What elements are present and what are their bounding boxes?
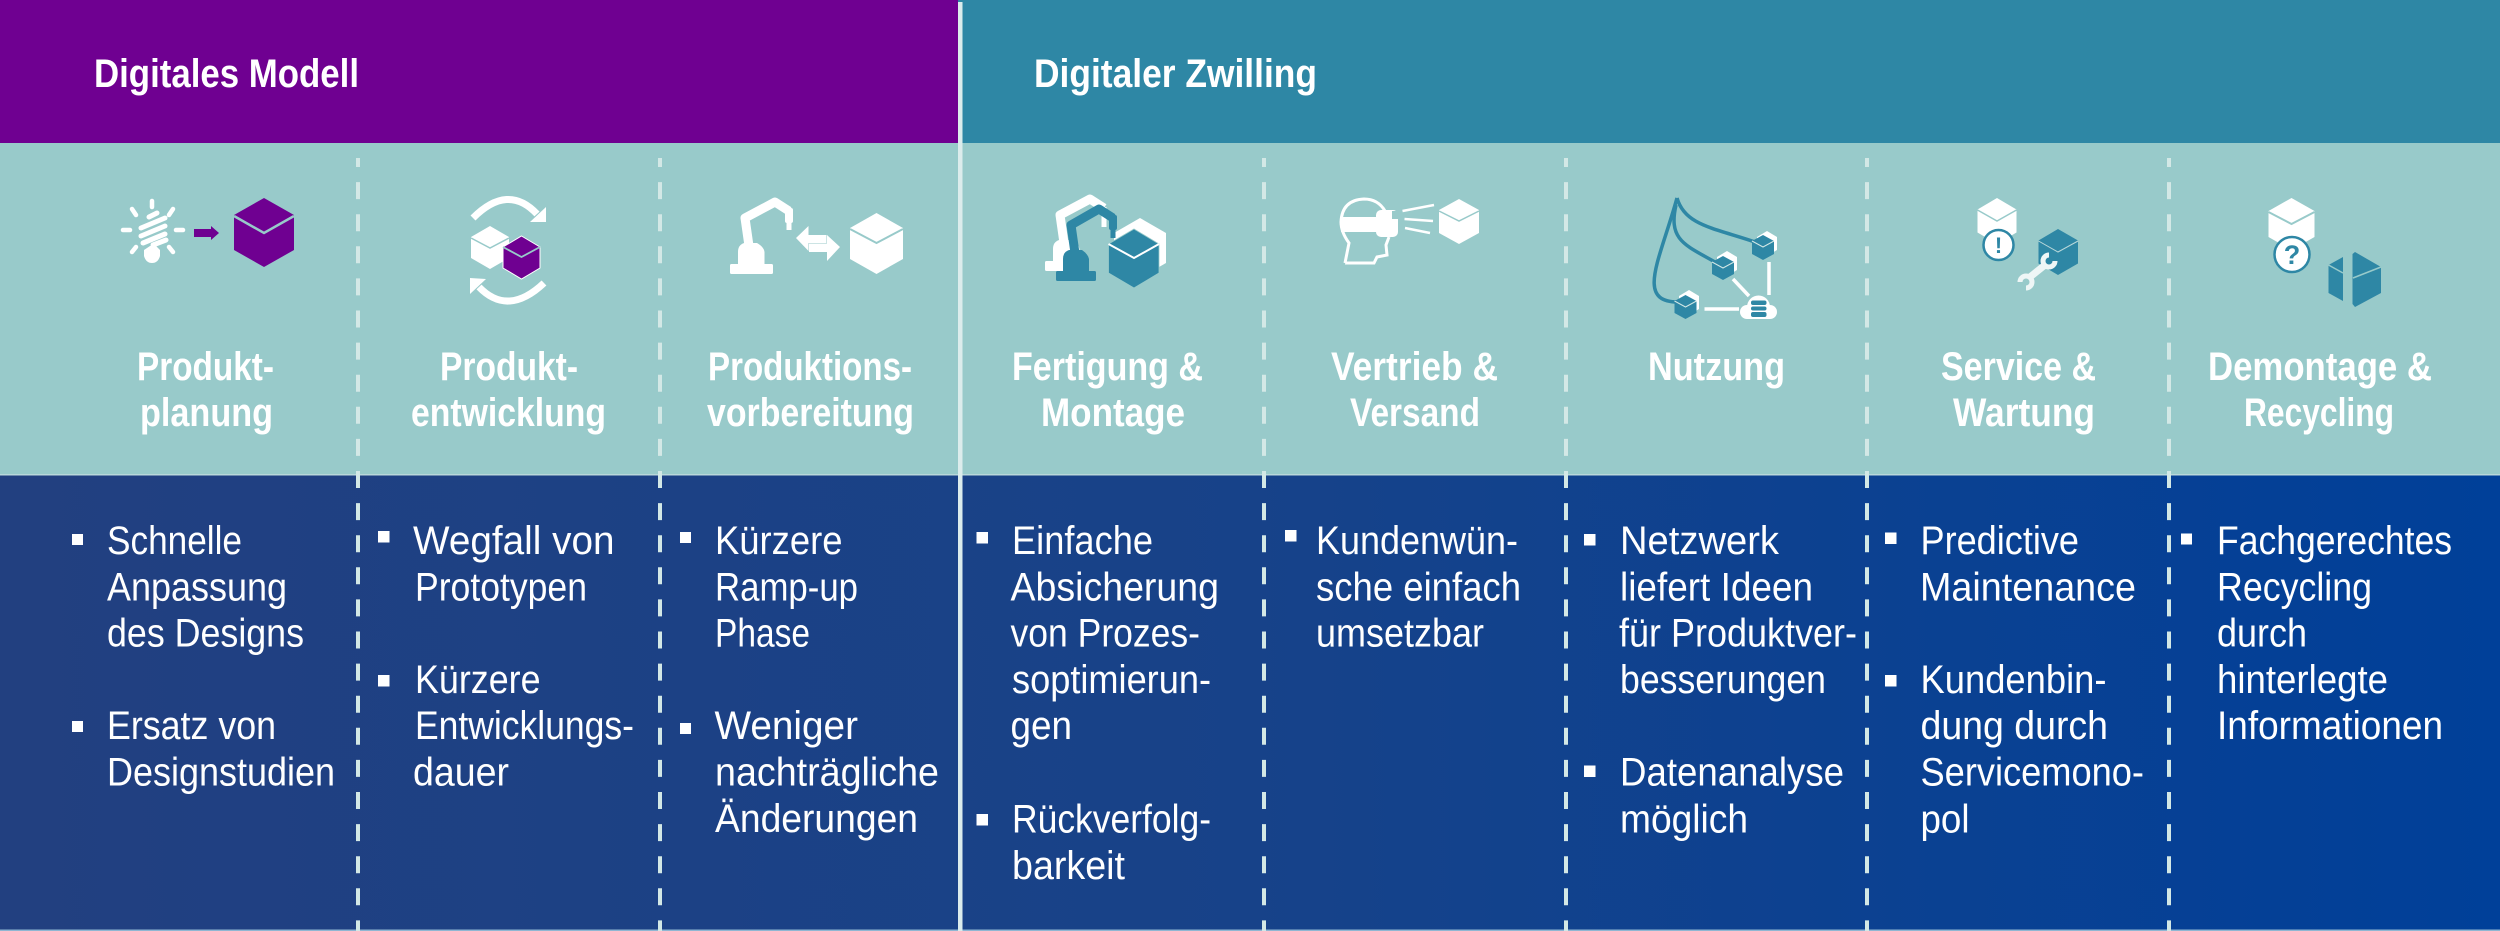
title: Produktionsvorbereitung: Produktions- [708,345,912,389]
bullet: Predictive Maintenance [1885,519,2136,609]
bullet: Einfache Absicherung von Prozessoptimierungen: gen [1010,704,1072,748]
bullet: Kundenbindung durch Servicemonopol: dung durch [1920,704,2108,748]
icon: cube question and split cube [2268,198,2381,307]
bullet: Kundenwünsche einfach umsetzbar: sche einfach [1316,565,1521,609]
title: Produktplanung: Produkt- [137,345,274,389]
bullet: Netzwerk liefert Ideen für Produktverbesserungen: besserungen [1620,658,1826,702]
title: Produktplanung [137,345,274,435]
title: Demontage und Recycling: Recycling [2244,391,2394,435]
icon: cube alert and repair [1978,198,2078,288]
icon: twin robot and cube [1045,199,1166,288]
bullet: Rückverfolgbarkeit: barkeit [1012,844,1125,888]
title: Demontage und Recycling: Demontage & [2208,345,2432,389]
bullet: Fachgerechtes Recycling durch hinterlegte Informationen: Informationen [2217,704,2443,748]
bullet: Kundenbindung durch Servicemonopol: Servicemono- [1920,750,2144,794]
bullet: Weniger nachträgliche Änderungen: Änderungen [715,797,918,841]
bullet: Wegfall von Prototypen: Prototypen [415,565,587,609]
bullet: Fachgerechtes Recycling durch hinterlegte Informationen [2181,519,2452,748]
bullet: Schnelle Anpassung des Designs: Schnelle [107,519,242,563]
title: Vertrieb und Versand: Vertrieb & [1331,345,1498,389]
bullet: Kundenwünsche einfach umsetzbar: umsetzbar [1316,612,1484,656]
title: Vertrieb und Versand [1331,345,1498,435]
bullet: Einfache Absicherung von Prozessoptimierungen [976,519,1219,748]
title: Fertigung und Montage [1012,345,1203,435]
bullet: Datenanalyse möglich: möglich [1620,798,1748,842]
bullet: Fachgerechtes Recycling durch hinterlegte Informationen: Fachgerechtes [2217,519,2452,563]
bullet: Fachgerechtes Recycling durch hinterlegte Informationen: hinterlegte [2217,658,2388,702]
heading: Digitales Modell: Digitales Modell [94,52,359,96]
bullet: Kundenbindung durch Servicemonopol [1885,658,2144,842]
bullet: Einfache Absicherung von Prozessoptimierungen: soptimierun- [1012,658,1211,702]
panel: header Digitales Modell [0,0,958,143]
bullet: Einfache Absicherung von Prozessoptimierungen: von Prozes- [1010,612,1200,656]
bullet: Kürzere Ramp-up Phase: Kürzere [715,519,842,563]
bullet: Netzwerk liefert Ideen für Produktverbesserungen: Netzwerk [1620,519,1780,563]
title: Demontage und Recycling [2208,345,2432,435]
bullet: Schnelle Anpassung des Designs: des Designs [107,612,304,656]
bullet: Kundenbindung durch Servicemonopol: Kundenbin- [1920,658,2106,702]
bullet: Ersatz von Designstudien [72,704,335,794]
icon: cubes with cycle arrows [470,199,546,301]
bullet: Netzwerk liefert Ideen für Produktverbesserungen: liefert Ideen [1620,565,1813,609]
bullet: Wegfall von Prototypen [378,519,614,609]
bullet: Weniger nachträgliche Änderungen: Weniger [714,704,858,748]
bullet: Rückverfolgbarkeit: Rückverfolg- [1012,798,1211,842]
bullet: Schnelle Anpassung des Designs [72,519,304,656]
title: Produktentwicklung [411,345,606,435]
bullet: Einfache Absicherung von Prozessoptimierungen: Absicherung [1010,565,1219,609]
panel: icon and title band [0,143,2500,475]
panel: benefits band [0,475,2500,931]
bullet: Kundenwünsche einfach umsetzbar: Kundenwün- [1316,519,1518,563]
icon: VR headset viewing cube [1341,199,1479,263]
bullet: Predictive Maintenance: Maintenance [1920,565,2136,609]
bullet: Kürzere Ramp-up Phase: Phase [715,612,810,656]
title: Produktplanung: planung [140,391,273,435]
title: Produktionsvorbereitung: vorbereitung [707,391,914,435]
bullet: Weniger nachträgliche Änderungen [680,704,939,841]
bullet: Ersatz von Designstudien: Designstudien [107,750,335,794]
bullet: Kürzere Ramp-up Phase: Ramp-up [715,565,858,609]
icon: light bulb to purple cube [123,198,294,267]
bullet: Fachgerechtes Recycling durch hinterlegte Informationen: Recycling [2217,565,2372,609]
title: Vertrieb und Versand: Versand [1350,391,1480,435]
bullet: Kürzere Entwicklungsdauer: Entwicklungs- [415,704,634,748]
bullet: Datenanalyse möglich [1584,750,1844,842]
bullet: Predictive Maintenance: Predictive [1920,519,2079,563]
bullet: Ersatz von Designstudien: Ersatz von [107,704,276,748]
title: Service und Wartung: Wartung [1953,391,2095,435]
bullet: Kundenwünsche einfach umsetzbar [1285,519,1521,656]
title: Service und Wartung: Service & [1941,345,2096,389]
title: Nutzung: Nutzung [1648,345,1785,389]
title: Service und Wartung [1941,345,2096,435]
bullet: Netzwerk liefert Ideen für Produktverbesserungen: für Produktver- [1619,612,1857,656]
title: Fertigung und Montage: Fertigung & [1012,345,1203,389]
icon: network of cubes and cloud [1654,198,1777,319]
bullet: Kürzere Ramp-up Phase [680,519,858,656]
title: Fertigung und Montage: Montage [1041,391,1185,435]
icon: cube alert and repair: ! [1995,233,2002,258]
bullet: Weniger nachträgliche Änderungen: nachträgliche [715,750,939,794]
bullet: Fachgerechtes Recycling durch hinterlegte Informationen: durch [2217,612,2307,656]
panel: header Digitaler Zwilling [958,0,2500,143]
bullet: Netzwerk liefert Ideen für Produktverbesserungen [1584,519,1857,702]
bullet: Wegfall von Prototypen: Wegfall von [413,519,614,563]
title: Produktionsvorbereitung [707,345,914,435]
bullet: Datenanalyse möglich: Datenanalyse [1620,750,1844,794]
icon: cube question and split cube: ? [2284,240,2300,270]
bullet: Kundenbindung durch Servicemonopol: pol [1920,798,1970,842]
bullet: Kürzere Entwicklungsdauer: Kürzere [415,658,540,702]
icon: robot exchanging with cube [730,202,903,274]
title: Produktentwicklung: Produkt- [440,345,578,389]
title: Produktentwicklung: entwicklung [411,391,606,435]
bullet: Rückverfolgbarkeit [976,798,1211,888]
bullet: Kürzere Entwicklungsdauer: dauer [413,750,509,794]
heading: Digitaler Zwilling: Digitaler Zwilling [1034,52,1317,96]
bullet: Einfache Absicherung von Prozessoptimierungen: Einfache [1012,519,1153,563]
bullet: Schnelle Anpassung des Designs: Anpassung [107,565,287,609]
bullet: Kürzere Entwicklungsdauer [378,658,634,794]
